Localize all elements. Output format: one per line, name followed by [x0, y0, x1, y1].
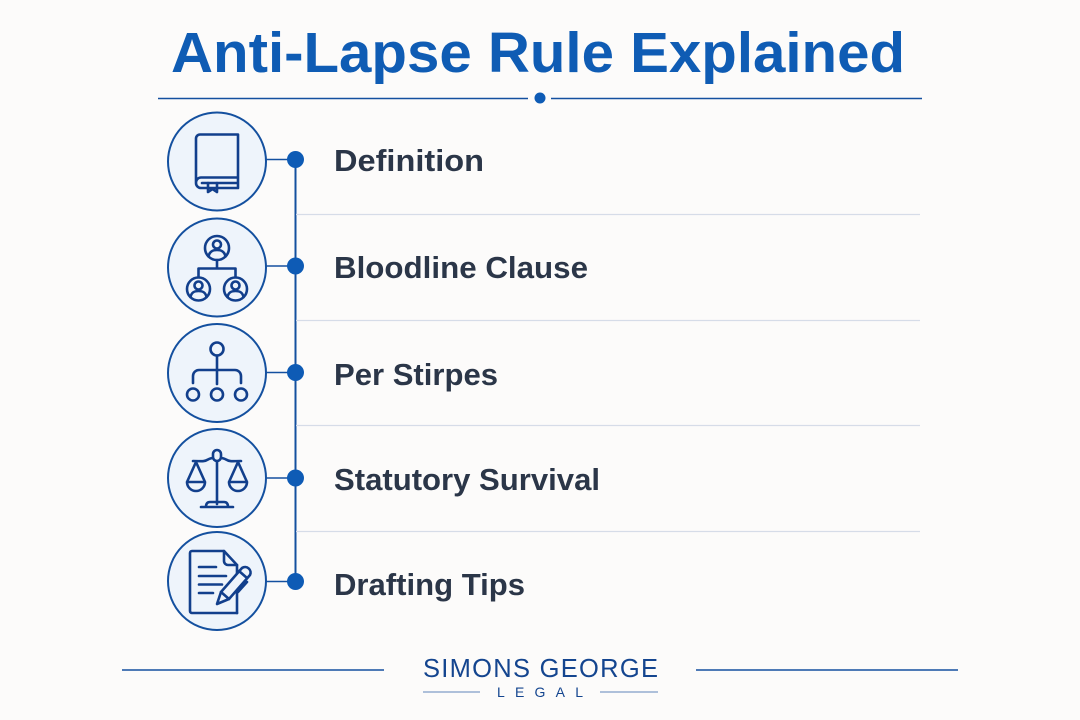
title divider: [158, 92, 922, 104]
icon: document and pen: [168, 532, 266, 630]
row: Statutory Survival: Statutory Survival: [334, 462, 600, 497]
footer rule left: [122, 669, 384, 671]
icon: scales of justice: [168, 429, 266, 527]
row: Definition: [168, 112, 484, 210]
row: Statutory Survival: [168, 429, 600, 527]
row: Drafting Tips: [168, 532, 525, 630]
row: Bloodline Clause: Bloodline Clause: [334, 250, 588, 285]
footer rule right: [696, 669, 958, 671]
title: Anti-Lapse Rule Explained: [171, 21, 905, 85]
footer logo: LEGAL: [497, 684, 583, 700]
row: Definition: Definition: [334, 143, 484, 178]
footer logo: [423, 655, 658, 700]
timeline spine: [294, 160, 296, 581]
icon: family tree of people: [168, 218, 266, 316]
row: Per Stirpes: [168, 324, 498, 422]
row: Drafting Tips: Drafting Tips: [334, 567, 525, 602]
icon: branching hierarchy: [168, 324, 266, 422]
row: Per Stirpes: Per Stirpes: [334, 357, 498, 392]
row: Bloodline Clause: [168, 218, 588, 316]
footer logo: SIMONS GEORGE: [423, 655, 658, 683]
icon: book: [168, 112, 266, 210]
